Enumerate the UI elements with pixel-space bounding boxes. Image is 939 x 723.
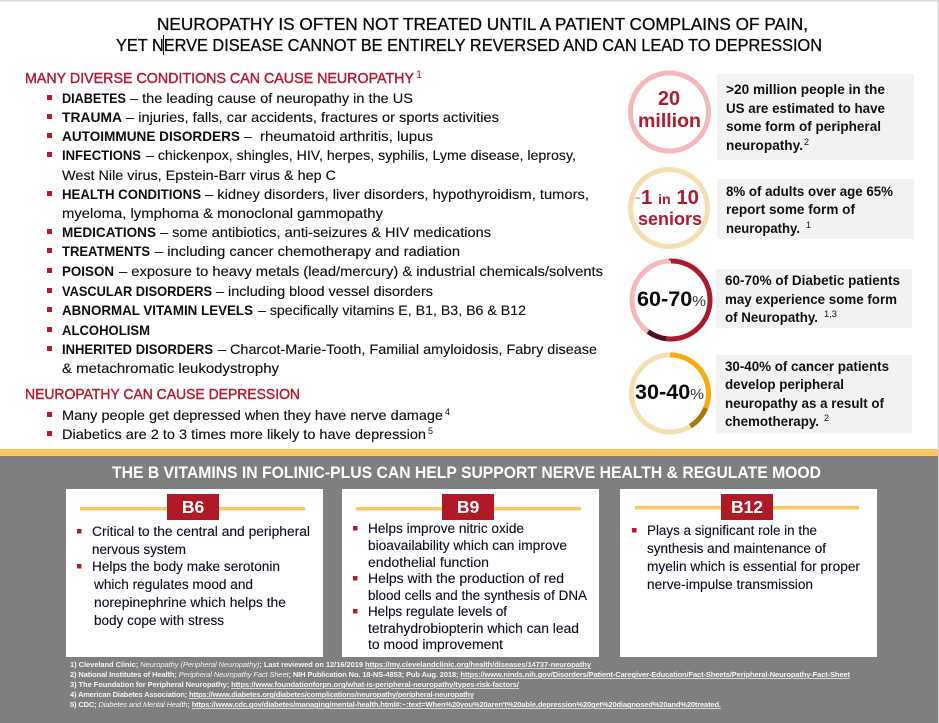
- icon: ring 30-40%: [632, 355, 708, 432]
- panel: seniors description: 8% of adults over age 65%: [726, 184, 893, 199]
- panel: cancer description: 30-40% of cancer patients: [725, 359, 889, 374]
- badge: B12: B12: [731, 497, 763, 517]
- list item: trauma: TRAUMA: [62, 109, 122, 125]
- list item: health conditions: HEALTH CONDITIONS: [62, 186, 201, 202]
- footnotes: 2) National Institutes of Health; Peripheral Neuropathy Fact Sheet; NIH Publication No. 18-NS-4853; Pub Aug. 2018; https://www.ninds.nih.gov/Disorders/Patient-Caregiver-Education/Fact-Sheets/Peripheral-Neuropathy-Fact-Sheet: [70, 670, 851, 679]
- stat value: 1 in 10 seniors: seniors: [638, 208, 702, 229]
- list item: infections: [47, 147, 576, 183]
- badge: B12: [721, 494, 773, 520]
- stat: 20 million: [630, 73, 914, 160]
- list item: depressed with nerve damage: 4: [445, 407, 450, 417]
- badge: B6: B6: [182, 497, 204, 517]
- stat: 60-70%: [632, 261, 912, 339]
- panel: 20 million description: neuropathy.: [726, 138, 803, 153]
- title: YET NERVE DISEASE CANNOT BE ENTIRELY REVERSED AND CAN LEAD TO DEPRESSION: [116, 35, 822, 55]
- stat value: 60-70%: 60-70%: [637, 288, 706, 311]
- heading: depression: NEUROPATHY CAN CAUSE DEPRESSION: [25, 386, 300, 403]
- panel: B vitamins section: [0, 449, 938, 723]
- list item: depressed with nerve damage: Many people get depressed when they have nerve damage: [62, 407, 443, 423]
- list item: medications: MEDICATIONS: [62, 224, 156, 240]
- panel: seniors description: 1: [806, 220, 811, 230]
- panel: 20 million description: some form of peripheral: [726, 119, 881, 134]
- footnotes: [70, 660, 851, 709]
- stat: 30-40%: [632, 355, 912, 433]
- list item: health conditions: – kidney disorders, liver disorders, hypothyroidism, tumors,: [205, 186, 589, 202]
- card: B9: [342, 489, 599, 657]
- list item: alcoholism: ALCOHOLISM: [62, 322, 150, 338]
- list item: diabetes: – the leading cause of neuropathy in the US: [130, 90, 413, 106]
- list item: diabetes: DIABETES: [62, 90, 126, 106]
- panel: diabetic description: [716, 269, 912, 328]
- stat value: 1 in 10 seniors: [635, 187, 702, 229]
- list item: health conditions: [47, 186, 589, 221]
- bullets: B9: Helps with the production of red: [368, 571, 564, 586]
- badge: B6: [167, 494, 219, 520]
- panel: 20 million description: US are estimated to have: [726, 101, 885, 116]
- list item: trauma: – injuries, falls, car accidents, fractures or sports activities: [126, 109, 499, 125]
- bullets: B9: [353, 521, 587, 652]
- footnotes: 5) CDC; Diabetes and Mental Health; https://www.cdc.gov/diabetes/managing/mental-health.html#:~:text=When%20you%20aren't%20able,depression%20get%20diagnosed%20and%20treated.: [70, 700, 721, 709]
- stat value: 30-40%: 30-40%: [635, 381, 704, 404]
- bullets: B6: [77, 524, 310, 628]
- badge: B9: [442, 494, 494, 520]
- list item: poison: POISON: [62, 263, 114, 279]
- list item: poison: – exposure to heavy metals (lead/mercury) & industrial chemicals/solvents: [119, 263, 603, 279]
- panel: diabetic description: 60-70% of Diabetic patients: [725, 273, 900, 288]
- list item: abnormal vitamin levels: – specifically vitamins E, B1, B3, B6 & B12: [258, 302, 526, 318]
- panel: cancer description: develop peripheral: [725, 377, 844, 392]
- bullets: B6: body cope with stress: [94, 613, 224, 628]
- list item: vascular disorders: [47, 283, 433, 299]
- list item: autoimmune disorders: [47, 128, 433, 144]
- footnotes: 4) American Diabetes Association; https://www.diabetes.org/diabetes/complications/neuropathy/peripheral-neuropathy: [70, 690, 475, 699]
- panel: 20 million description: [717, 74, 914, 160]
- stat: 1 in 10 seniors: [630, 170, 914, 246]
- panel: causes of neuropathy: [25, 69, 603, 376]
- panel: 20 million description: >20 million people in the: [726, 82, 885, 97]
- stat value: 20 million: million: [638, 110, 701, 132]
- list item: infections: – chickenpox, shingles, HIV, herpes, syphilis, Lyme disease, leprosy,: [146, 147, 576, 163]
- bullets: B9: to mood improvement: [368, 637, 503, 652]
- list item: autoimmune disorders: –: [244, 128, 252, 144]
- panel: cancer description: [716, 355, 912, 433]
- panel: seniors description: neuropathy.: [726, 221, 800, 236]
- stat value: 20 million: 20: [658, 88, 680, 110]
- panel: diabetic description: may experience some form: [725, 292, 897, 307]
- list item: inherited disorders: & metachromatic leukodystrophy: [62, 360, 279, 376]
- list item: abnormal vitamin levels: [47, 302, 526, 318]
- bullets: B12: myelin which is essential for proper: [647, 559, 861, 574]
- panel: cancer description: neuropathy as a result of: [725, 396, 884, 411]
- bullets: B12: nerve-impulse transmission: [647, 577, 813, 592]
- bullets: B9: Helps improve nitric oxide: [368, 521, 524, 536]
- panel: cancer description: chemotherapy.: [725, 414, 819, 429]
- panel: depression: [25, 386, 450, 442]
- list item: treatments: TREATMENTS: [62, 243, 150, 259]
- card: B12: [620, 489, 877, 657]
- bullets: B9: bioavailability which can improve: [368, 538, 567, 553]
- bullets: B6: nervous system: [92, 542, 186, 557]
- bullets: B9: endothelial function: [368, 555, 489, 570]
- list item: inherited disorders: [47, 341, 597, 376]
- panel: seniors description: [717, 179, 914, 239]
- list item: vascular disorders: – including blood vessel disorders: [216, 283, 433, 299]
- title: NEUROPATHY IS OFTEN NOT TREATED UNTIL A PATIENT COMPLAINS OF PAIN,: [157, 14, 808, 34]
- panel: diabetic description: 1,3: [824, 309, 837, 319]
- heading: causes: MANY DIVERSE CONDITIONS CAN CAUSE NEUROPATHY: [25, 70, 414, 87]
- list item: diabetics more likely: 5: [428, 426, 433, 436]
- list item: treatments: – including cancer chemotherapy and radiation: [155, 243, 460, 259]
- list item: autoimmune disorders: AUTOIMMUNE DISORDERS: [62, 128, 240, 144]
- list item: vascular disorders: VASCULAR DISORDERS: [62, 283, 212, 299]
- icon: ring 20 million: [630, 73, 708, 151]
- bullets: B12: [632, 523, 861, 592]
- bullets: B6: Critical to the central and peripheral: [92, 524, 310, 539]
- panel: 20 million description: 2: [804, 137, 809, 147]
- icon: ring 60-70%: [632, 261, 710, 339]
- list item: inherited disorders: – Charcot-Marie-Tooth, Familial amyloidosis, Fabry disease: [218, 341, 597, 357]
- list item: infections: INFECTIONS: [62, 147, 141, 163]
- bullets: B6: norepinephrine which helps the: [94, 595, 286, 610]
- badge: B9: B9: [457, 497, 479, 517]
- stat value: 20 million: [638, 88, 701, 132]
- bullets: B6: Helps the body make serotonin: [92, 559, 280, 574]
- stat value: 1 in 10 seniors: ~: [635, 193, 640, 203]
- panel: cancer description: 2: [824, 413, 829, 423]
- footnotes: 3) The Foundation for Peripheral Neuropathy; https://www.foundationforpn.org/what-is-peripheral-neuropathy/types-risk-factors/: [70, 680, 520, 689]
- heading: causes: 1: [416, 69, 422, 81]
- list item: inherited disorders: INHERITED DISORDERS: [62, 341, 213, 357]
- bullets: B9: tetrahydrobiopterin which can lead: [368, 621, 579, 636]
- section heading: THE B VITAMINS IN FOLINIC-PLUS CAN HELP SUPPORT NERVE HEALTH & REGULATE MOOD: [112, 464, 821, 482]
- list item: health conditions: myeloma, lymphoma & monoclonal gammopathy: [62, 205, 383, 221]
- list item: autoimmune disorders: rheumatoid arthritis, lupus: [260, 128, 433, 144]
- list item: medications: – some antibiotics, anti-seizures & HIV medications: [160, 224, 491, 240]
- title: [116, 14, 822, 55]
- card: B6: [66, 489, 323, 657]
- list item: infections: West Nile virus, Epstein-Barr virus & hep C: [62, 167, 336, 183]
- bullets: B12: Plays a significant role in the: [647, 523, 817, 538]
- panel: seniors description: report some form of: [726, 202, 856, 217]
- bullets: B9: Helps regulate levels of: [368, 604, 507, 619]
- bullets: B9: blood cells and the synthesis of DNA: [368, 588, 587, 603]
- panel: diabetic description: of Neuropathy.: [725, 310, 818, 325]
- list item: abnormal vitamin levels: ABNORMAL VITAMIN LEVELS: [62, 302, 253, 318]
- stat value: 1 in 10 seniors: 1 in 10: [641, 187, 699, 209]
- bullets: B6: which regulates mood and: [93, 577, 253, 592]
- bullets: B12: synthesis and maintenance of: [647, 541, 826, 556]
- list item: diabetics more likely: Diabetics are 2 to 3 times more likely to have depression: [62, 426, 426, 442]
- icon: ring 1 in 10: [630, 170, 708, 246]
- footnotes: 1) Cleveland Clinic; Neuropathy (Peripheral Neuropathy); Last reviewed on 12/16/2019 https://my.clevelandclinic.org/health/diseases/14737-neuropathy: [70, 660, 592, 669]
